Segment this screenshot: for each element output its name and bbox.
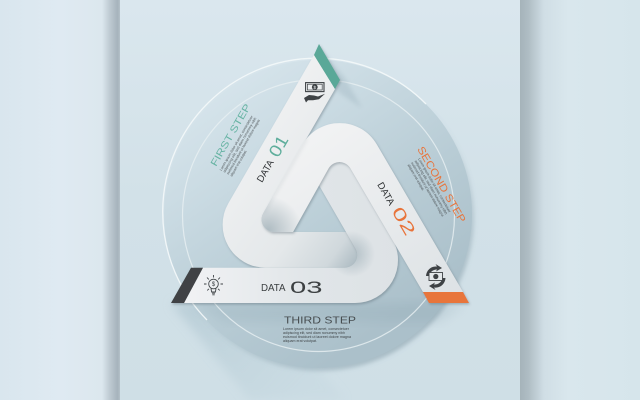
icon: light bulb with dollar	[204, 275, 223, 295]
icon: circular arrows around banknote	[426, 264, 446, 290]
text block: first step: Lorem ipsum dolor sit amet, consectetuer	[219, 114, 254, 172]
text block: first step: adipiscing elit, sed diam nonummy nibh	[222, 117, 257, 173]
ribbon one: first step strip	[223, 44, 370, 268]
right background panel	[520, 0, 640, 400]
text block: third step: aliquam erat volutpat.	[283, 339, 317, 343]
icon: hand holding banknote: $	[314, 85, 317, 90]
heading: third step: THIRD STEP	[284, 316, 356, 327]
left background panel	[0, 0, 120, 400]
inner ring	[182, 80, 454, 352]
label: data 03	[261, 278, 322, 297]
label: data 02	[374, 180, 419, 239]
outer ring	[163, 58, 426, 320]
disk	[164, 60, 474, 371]
label: data 01	[255, 132, 292, 184]
text block: third step: euismod tincidunt ut laoreet dolore magna	[283, 335, 352, 339]
shadow behind teal end	[322, 50, 362, 108]
text block: second step: adipiscing elit, sed diam nonummy nibh	[414, 160, 448, 215]
text block: third step: Lorem ipsum dolor sit amet, consectetuer	[283, 327, 350, 331]
label: data 02: 02	[388, 204, 419, 239]
text block: second step: Lorem ipsum dolor sit amet, consectetuer	[417, 158, 452, 214]
ribbon three: third step strip	[171, 155, 398, 303]
shadow of ribbon one across ribbon two	[266, 140, 306, 210]
icon: hand holding banknote	[304, 83, 325, 102]
long shadow under ribbon	[176, 304, 275, 390]
icon: light bulb with dollar: $	[212, 281, 216, 288]
text block: first step: aliquam erat volutpat.	[229, 149, 248, 177]
center poster panel	[120, 0, 520, 400]
orange ribbon end	[423, 292, 469, 303]
text block: third step	[283, 327, 352, 343]
label: data 03: 03	[290, 278, 322, 297]
heading: second step: SECOND STEP	[414, 144, 468, 225]
teal ribbon end	[314, 44, 340, 89]
label: data 02: DATA	[374, 180, 397, 208]
ribbon two: second step strip	[262, 123, 469, 303]
label: data 03: DATA	[261, 283, 286, 294]
dark ribbon end	[171, 268, 203, 303]
hole and ribbon cast shadow on disk	[190, 303, 465, 322]
text block: third step: adipiscing elit, sed diam nonummy nibh	[283, 331, 345, 335]
label: data 01: DATA	[255, 158, 277, 184]
heading: first step: FIRST STEP	[209, 102, 254, 168]
label: data 01: 01	[265, 132, 292, 160]
text block: first step: euismod tincidunt ut laoreet dolore magna	[226, 119, 261, 175]
text block: second step: aliquam erat volutpat.	[407, 164, 425, 191]
text block: second step: euismod tincidunt ut laoreet dolore magna	[410, 162, 445, 217]
